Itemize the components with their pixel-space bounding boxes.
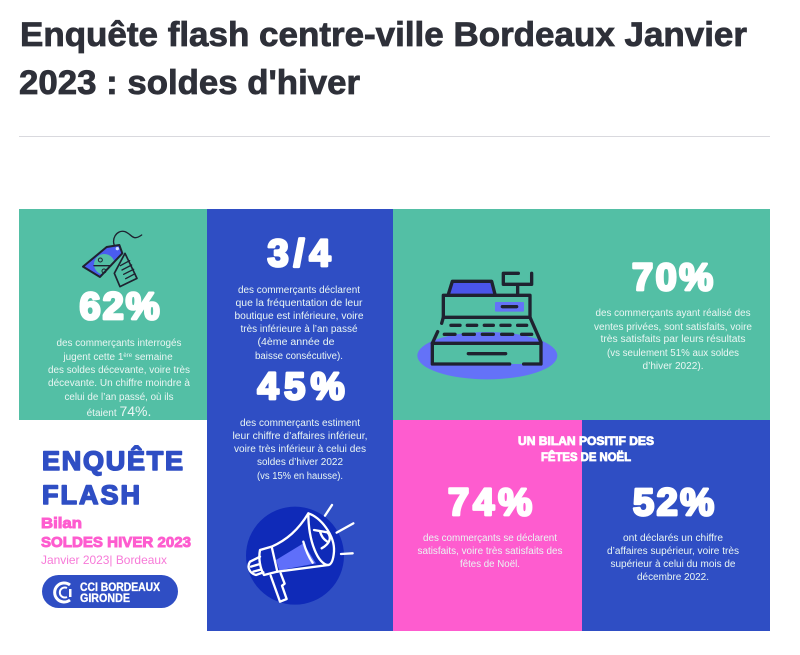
stat: 45%: 45% [258, 366, 344, 408]
subtitle: bilan soldes hiver: SOLDES HIVER 2023 [41, 534, 191, 551]
logo: CCI Bordeaux Gironde [42, 575, 178, 608]
stat: 62%: 62% [80, 286, 160, 328]
text: 52% description: d’affaires supérieur, voire très [607, 546, 739, 557]
text: 3/4 description: boutique est inférieure, voire [234, 311, 364, 322]
text: 70% description [594, 308, 752, 372]
heading: enquête flash [42, 445, 183, 510]
text: 74% description: satisfaits, voire très satisfaits des [418, 546, 562, 557]
panel: enquête flash branding [41, 445, 191, 608]
icon: megaphone [246, 505, 353, 605]
text: 62% description: étaient 74%. [87, 403, 151, 419]
text: 45% description [232, 418, 368, 482]
text: 62% description: des commerçants interrogés [56, 338, 182, 349]
panel: 52% chiffre d'affaires décembre [582, 420, 770, 631]
panel: fréquentation and chiffre d'affaires [207, 209, 393, 631]
logo: CCI Bordeaux Gironde: GIRONDE [80, 591, 130, 605]
text: 74% description: fêtes de Noël. [460, 559, 520, 570]
icon: price tags [83, 231, 142, 287]
text: 70% description: ventes privées, sont satisfaits, voire [594, 322, 752, 333]
stat: 52%: 52% [633, 482, 714, 524]
heading: un bilan positif des fêtes de Noël: UN BILAN POSITIF DES [518, 434, 654, 448]
text: 70% description: très satisfaits par leurs résultats [600, 334, 746, 345]
text: 70% description: (vs seulement 51% aux soldes [607, 348, 739, 359]
panel: 74% fêtes de Noël [393, 420, 582, 631]
text: 52% description [607, 533, 739, 583]
text: 3/4 description: très inférieure à l’an passé [240, 324, 358, 335]
text: 62% description: celui de l’an passé, où ils [64, 392, 174, 403]
text: 45% description: (vs 15% en hausse). [257, 471, 343, 482]
text: 70% description: d’hiver 2022). [642, 361, 704, 372]
text: 62% description: jugent cette 1 [63, 352, 123, 363]
text: 45% description: voire très inférieur à celui des [234, 444, 366, 455]
text: 62% description: semaine [132, 352, 173, 363]
text: 3/4 description: baisse consécutive). [255, 351, 343, 362]
heading: enquête flash: ENQUÊTE [42, 445, 183, 476]
text: 62% description [48, 338, 190, 419]
stat: 3/4: 3/4 [268, 233, 330, 275]
text: 62% description: ère [123, 353, 133, 359]
text: 52% description: supérieur à celui du mois de [610, 559, 736, 570]
text: date and place: Janvier 2023| Bordeaux [41, 553, 167, 567]
text: 52% description: décembre 2022. [637, 572, 709, 583]
heading: un bilan positif des fêtes de Noël: FÊTES DE NOËL [541, 449, 631, 464]
text: 70% description: des commerçants ayant réalisé des [596, 308, 750, 319]
text: 45% description: soldes d’hiver 2022 [257, 457, 343, 468]
title: 2023 : soldes d'hiver [19, 64, 360, 102]
stat: 70%: 70% [632, 257, 713, 299]
title: Enquête flash centre-ville Bordeaux Janvier [20, 16, 747, 54]
text: 74% description: des commerçants se déclarent [423, 533, 557, 544]
subtitle: bilan soldes hiver: Bilan [41, 515, 82, 532]
text: 3/4 description: que la fréquentation de leur [236, 298, 363, 309]
text: 62% description: des soldes décevante, voire très [48, 365, 190, 376]
text: 3/4 description: (4ème année de [258, 337, 335, 348]
stat: 74%: 74% [448, 482, 532, 524]
logo: CCI Bordeaux Gironde: CCI BORDEAUX [80, 580, 160, 594]
text: 45% description: leur chiffre d’affaires inférieur, [232, 431, 368, 442]
text: 74% description [418, 533, 562, 570]
text: 3/4 description: des commerçants déclarent [238, 285, 360, 296]
panel: 62% [19, 209, 207, 420]
text: 45% description: des commerçants estiment [240, 418, 360, 429]
text: 52% description: ont déclarés un chiffre [623, 533, 723, 544]
panel: 70% ventes privées [393, 209, 770, 420]
text: 62% description: décevante. Un chiffre moindre à [48, 378, 190, 389]
text: 3/4 description [234, 285, 364, 362]
heading: un bilan positif des fêtes de Noël [518, 434, 654, 464]
title [19, 16, 747, 102]
subtitle: bilan soldes hiver [41, 515, 191, 551]
heading: enquête flash: FLASH [42, 480, 140, 510]
icon: cash register [417, 273, 557, 379]
